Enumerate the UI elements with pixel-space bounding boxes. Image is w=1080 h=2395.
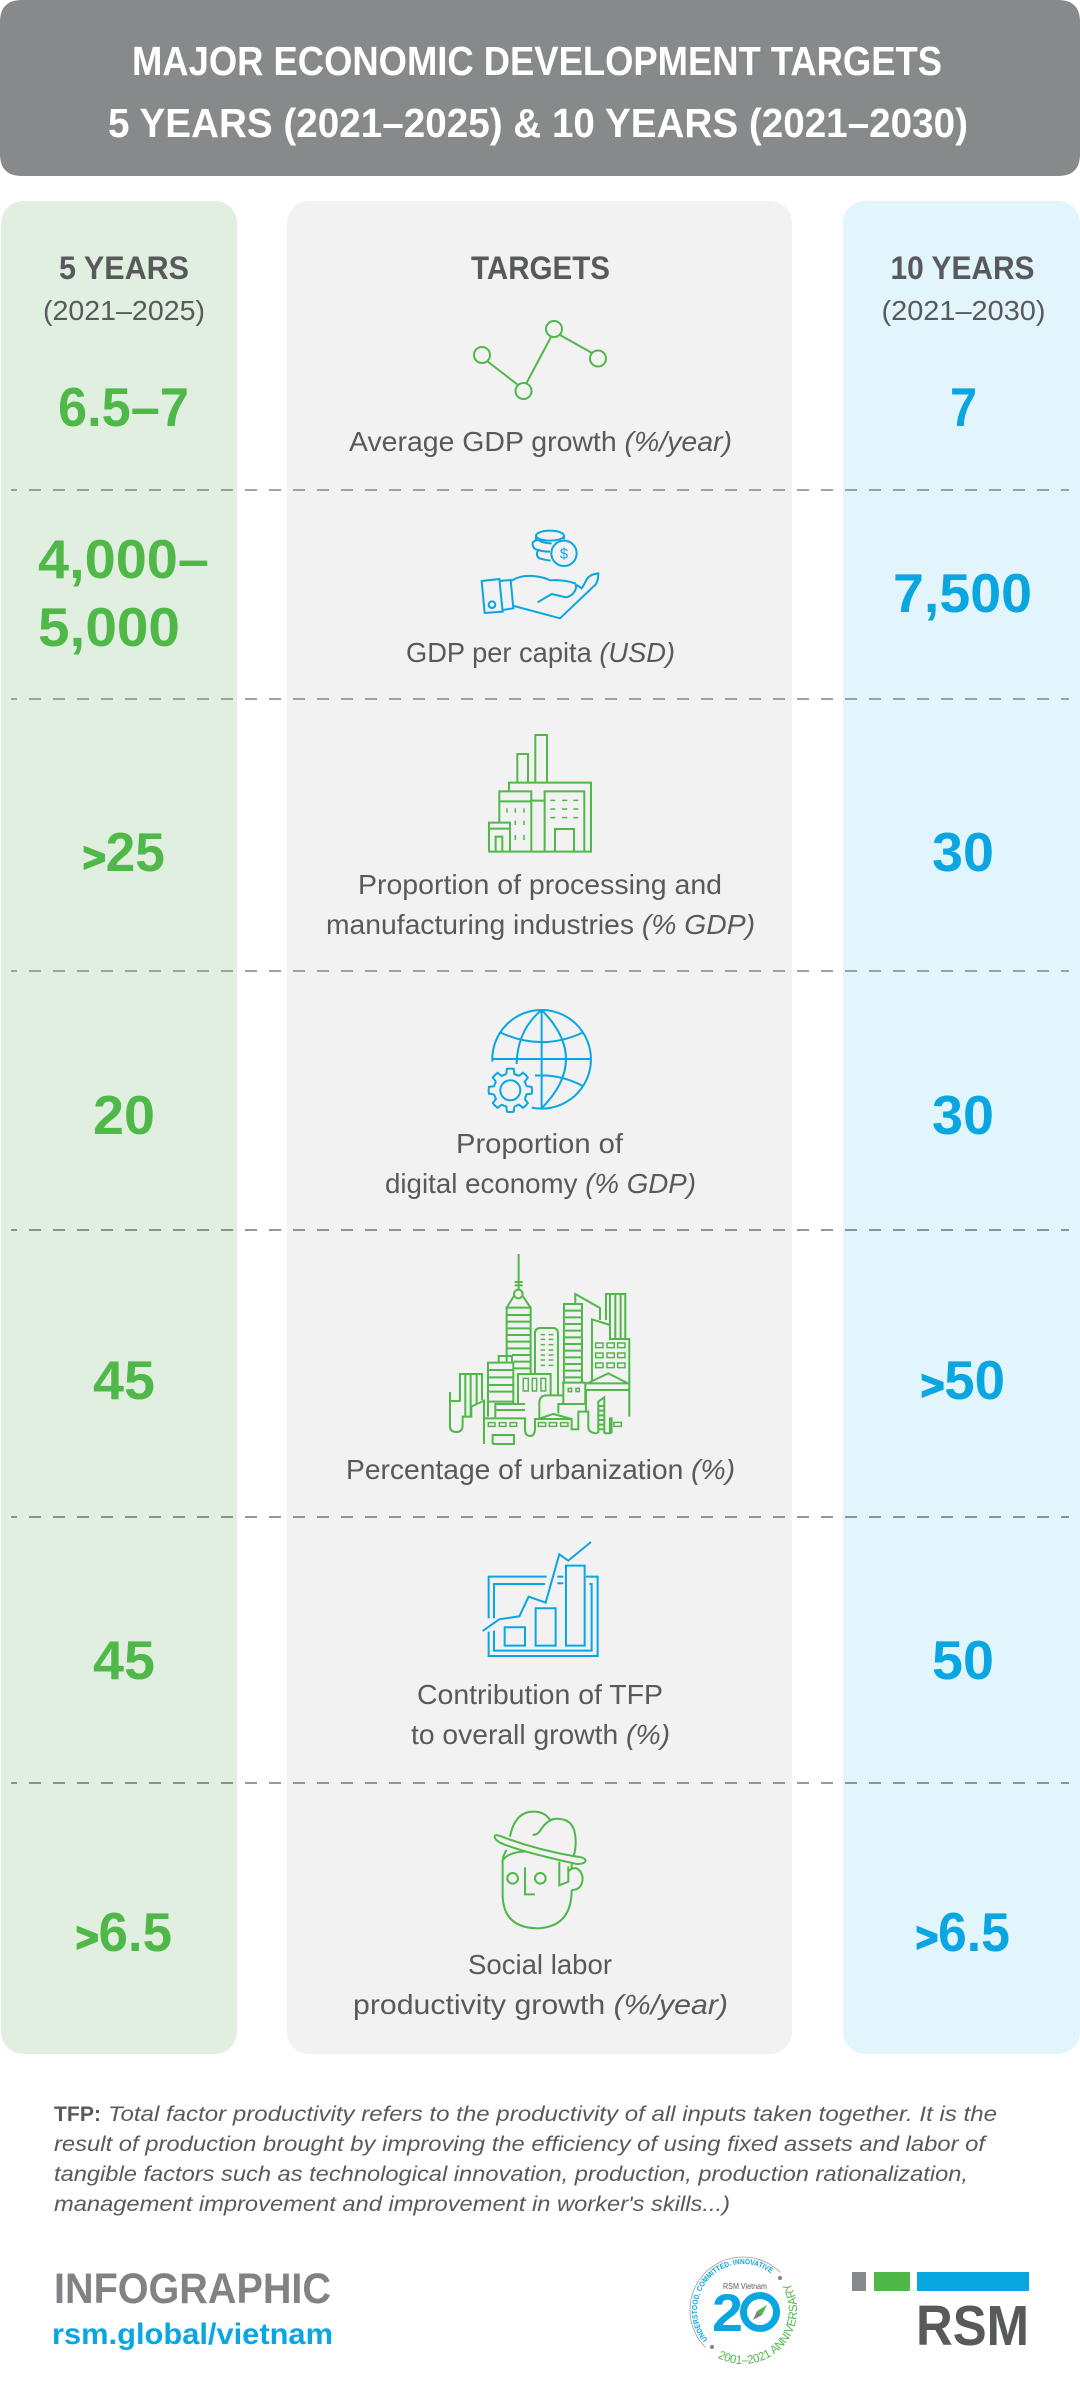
logo: RSM: [852, 2272, 1029, 2358]
subheading: 5 years period: (2021–2025): [43, 295, 205, 326]
heading: 10 years: 10 YEARS: [890, 250, 1034, 286]
footer link: website: rsm.global/vietnam: [52, 2318, 333, 2351]
value: manufacturing 10 years: 30: [932, 821, 994, 883]
label: labor productivity: productivity growth (%/year): [353, 1989, 728, 2020]
footer label: infographic: INFOGRAPHIC: [54, 2265, 331, 2313]
label: TFP contribution: [411, 1679, 670, 1750]
logo: 20th anniversary badge: RSM Vietnam: [723, 2281, 767, 2291]
value: urbanization 10 years: >50: [921, 1349, 1005, 1411]
logo: 20th anniversary badge: 2001–2021 ANNIVERSARY: [718, 2285, 798, 2364]
logo: 20th anniversary badge: [690, 2256, 798, 2364]
value: GDP per capita 10 years: 7,500: [893, 562, 1032, 624]
label: manufacturing industries: Proportion of processing and: [358, 869, 722, 900]
icon: worker face with hat: [495, 1812, 586, 1928]
value: digital economy 5 years: 20: [93, 1084, 155, 1146]
footnote: TFP definition: TFP:: [54, 2103, 101, 2126]
panel: 10 years column: [843, 201, 1080, 2054]
label: TFP contribution: to overall growth (%): [411, 1719, 670, 1750]
label: TFP contribution: Contribution of TFP: [417, 1679, 663, 1710]
label: GDP per capita: GDP per capita (USD): [406, 637, 675, 668]
logo: 20th anniversary badge: UNDERSTOOD. COMMITTED. INNOVATIVE: [692, 2258, 774, 2342]
value: GDP per capita 5 years: 4,000–: [38, 528, 209, 590]
logo: RSM: RSM: [916, 2294, 1029, 2358]
panel: 5 years column: [1, 201, 237, 2054]
footnote: TFP definition: management improvement and improvement in worker's skills...): [54, 2193, 730, 2216]
heading: 5 years: 5 YEARS: [59, 250, 189, 286]
footnote: TFP definition: result of production brought by improving the efficiency of using fixed assets and labor of: [54, 2133, 987, 2156]
title banner: 5 YEARS (2021–2025) & 10 YEARS (2021–2030): [108, 100, 968, 146]
label: digital economy: digital economy (% GDP): [385, 1168, 696, 1199]
value: GDP growth 10 years: 7: [950, 376, 977, 438]
label: labor productivity: [353, 1949, 728, 2020]
label: manufacturing industries: manufacturing industries (% GDP): [326, 909, 755, 940]
label: labor productivity: Social labor: [468, 1949, 612, 1980]
logo: 20th anniversary badge: 2: [712, 2284, 743, 2343]
heading: targets: TARGETS: [471, 250, 610, 286]
icon: globe with gear: [489, 1010, 591, 1112]
footnote: TFP definition: tangible factors such as technological innovation, production, production rationalization,: [54, 2163, 968, 2186]
icon: line chart: [474, 321, 606, 399]
title banner: [0, 0, 1080, 176]
panel: targets column: [287, 201, 792, 2054]
value: GDP per capita 5 years: 5,000: [38, 596, 180, 658]
label: GDP growth: Average GDP growth (%/year): [349, 426, 732, 457]
value: urbanization 5 years: 45: [93, 1349, 155, 1411]
icon: hand with coins: $: [560, 547, 568, 563]
icon: factory: [488, 735, 591, 852]
title banner: MAJOR ECONOMIC DEVELOPMENT TARGETS: [132, 38, 942, 84]
label: digital economy: [385, 1128, 696, 1199]
subheading: 10 years period: (2021–2030): [882, 295, 1046, 326]
value: GDP growth 5 years: 6.5–7: [58, 376, 189, 438]
icon: city skyline: [450, 1254, 629, 1444]
value: digital economy 10 years: 30: [932, 1084, 994, 1146]
value: manufacturing 5 years: >25: [83, 821, 165, 883]
label: urbanization: Percentage of urbanization (%): [346, 1454, 735, 1485]
value: TFP 5 years: 45: [93, 1629, 155, 1691]
value: labor productivity 10 years: >6.5: [916, 1901, 1010, 1963]
value: TFP 10 years: 50: [932, 1629, 994, 1691]
value: GDP per capita 5 years: [38, 528, 209, 658]
icon: hand with coins: [482, 531, 598, 618]
footnote: TFP definition: Total factor productivity refers to the productivity of all inputs taken together. It is the: [108, 2103, 997, 2126]
label: manufacturing industries: [326, 869, 755, 940]
label: digital economy: Proportion of: [456, 1128, 623, 1159]
footnote: TFP definition: [54, 2103, 997, 2216]
value: labor productivity 5 years: >6.5: [76, 1901, 172, 1963]
icon: growth bar chart: [483, 1542, 598, 1656]
